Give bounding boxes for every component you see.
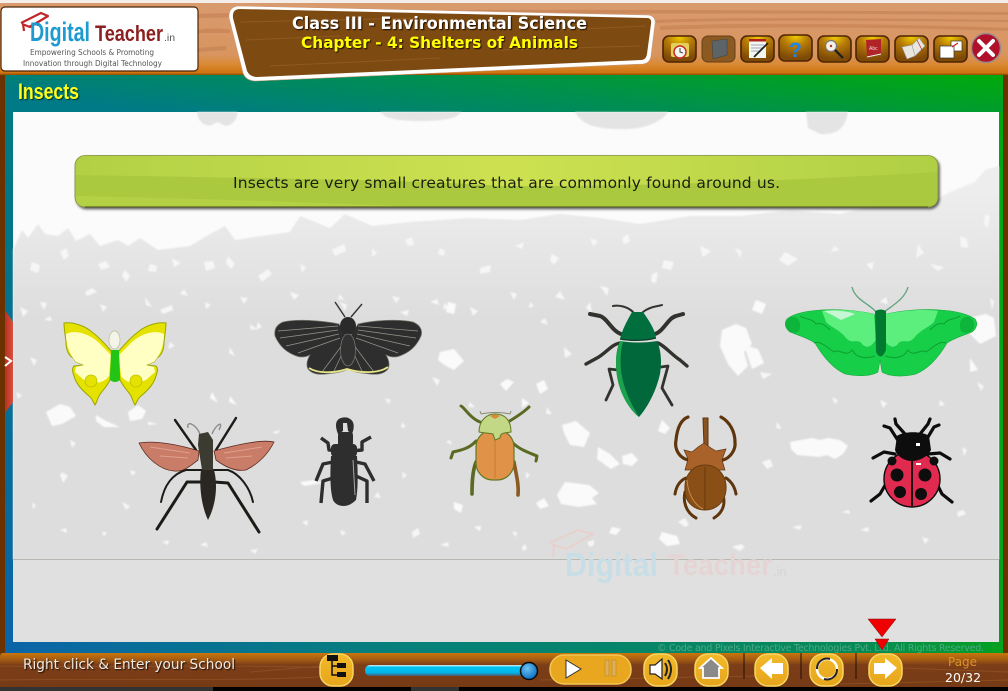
- icon: next arrow button: [869, 654, 902, 686]
- lower plain strip: [13, 559, 999, 642]
- play and pause pill: [550, 655, 631, 684]
- title plaque: Class III - Environmental Science: [292, 14, 587, 33]
- panel: content background: [13, 112, 999, 642]
- page counter: [945, 655, 981, 685]
- insect: green beetle: [586, 305, 687, 417]
- watermark: Digital Teacher logo: Teacher: [668, 549, 772, 582]
- copyright note: © Code and Pixels Interactive Technologies Pvt. Ltd. All Rights Reserved.: [657, 643, 984, 654]
- icon: magnifier button: [818, 36, 851, 62]
- logo panel: .in: [164, 32, 175, 44]
- insect: black moth: [275, 302, 422, 374]
- controls: bottom playback bar: [320, 653, 902, 686]
- logo panel: Innovation through Digital Technology: [23, 59, 162, 68]
- logo panel: Teacher: [95, 21, 163, 46]
- lower flecks and larger patches: [46, 300, 996, 546]
- watermark: Digital Teacher logo: Digital: [565, 546, 658, 583]
- insect: yellow butterfly: [64, 323, 166, 405]
- top wooden bar: [0, 3, 1008, 75]
- page counter: 20/32: [945, 670, 981, 685]
- arrow: red pointer to next: [868, 619, 896, 650]
- insect: wasp with red wings: [139, 418, 274, 532]
- icon: contents tree button: [320, 654, 353, 686]
- icon: graduation cap: [21, 13, 48, 31]
- icon: home button: [695, 654, 728, 686]
- callout: green sentence banner: Insects are very small creatures that are commonly found around us.: [233, 174, 780, 192]
- icon: help button: ?: [789, 39, 802, 62]
- logo panel: Empowering Schools & Promoting: [30, 48, 154, 57]
- insect: orange beetle: [451, 406, 537, 495]
- icon: reference book button: [702, 36, 735, 62]
- insect: brown horned beetle: [675, 417, 736, 518]
- title plaque: [229, 6, 655, 81]
- upper flecks: [20, 214, 994, 379]
- icon: help button: [779, 35, 812, 62]
- icon: open book button: [895, 36, 928, 62]
- icon: sound button: [644, 654, 677, 686]
- progress slider: [365, 662, 538, 680]
- icon: dictionary button: [856, 36, 889, 62]
- left side tab: [5, 310, 13, 413]
- bottom wooden bar: [0, 653, 1008, 691]
- icon: clock folder button: [663, 36, 696, 62]
- heading: Insects: Insects: [18, 79, 79, 104]
- watermark: Digital Teacher logo: .in: [773, 564, 787, 579]
- icon: window resize button: [934, 36, 967, 62]
- icon: dictionary button: Abc: [869, 46, 878, 52]
- insect: bright green butterfly: [785, 287, 977, 376]
- insect: black stag beetle: [316, 417, 374, 506]
- school prompt text: Right click & Enter your School: [23, 657, 235, 673]
- insect: red ladybug: [871, 419, 952, 507]
- callout: green sentence banner: [75, 156, 938, 207]
- icon: notepad button: [741, 36, 774, 62]
- page counter: Page: [948, 655, 977, 669]
- icon: close button: [972, 34, 1000, 62]
- top silhouettes: [197, 112, 848, 134]
- icon: back arrow button: [755, 654, 788, 686]
- logo panel: Digital: [30, 17, 90, 47]
- title plaque: Chapter - 4: Shelters of Animals: [301, 33, 578, 52]
- background foliage texture: [13, 112, 999, 560]
- logo panel: [1, 7, 198, 71]
- toolbar: top buttons: [663, 34, 1000, 62]
- watermark: Digital Teacher logo: [549, 530, 787, 583]
- icon: replay button: [810, 654, 843, 686]
